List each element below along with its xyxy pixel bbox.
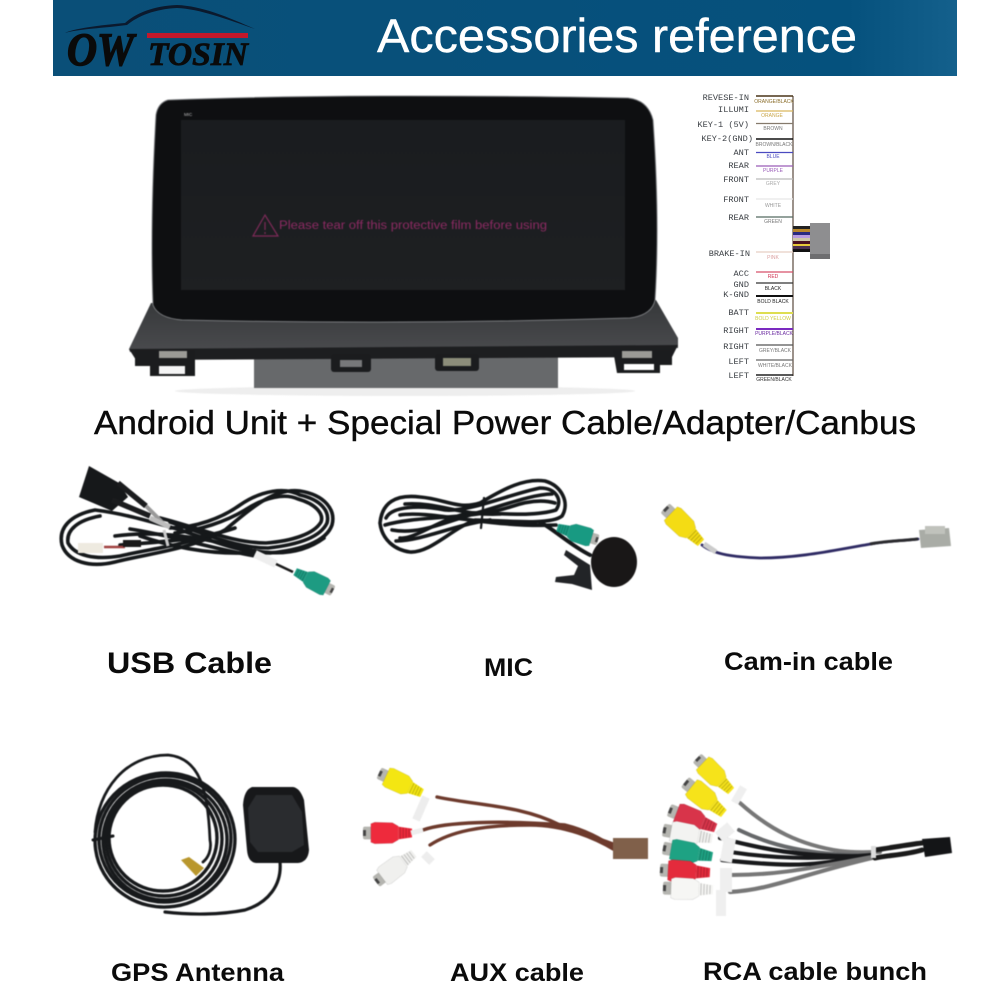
wire names: LEFT — [728, 371, 749, 381]
label: MIC: MIC — [484, 654, 533, 682]
USB connector housings — [79, 466, 128, 511]
wire names: ILLUMI — [718, 105, 749, 115]
wire colour names: RED — [768, 274, 779, 280]
gold SMA connector — [181, 857, 204, 876]
wire colour names: GREY — [766, 181, 781, 187]
wire names — [697, 93, 753, 381]
wire colour names: BROWN/BLACK — [756, 142, 793, 148]
cable coil — [380, 480, 590, 555]
item: GPS antenna — [86, 755, 309, 916]
wire colour names: GREEN/BLACK — [756, 377, 792, 383]
green RCA plug — [291, 563, 337, 599]
leader lines — [756, 96, 793, 375]
wire colour names: WHITE/BLACK — [758, 363, 793, 369]
wire names: LEFT — [728, 357, 749, 367]
logo: Owtosin: OW — [67, 24, 137, 76]
wire names: REAR — [728, 161, 749, 171]
grey connector — [919, 528, 951, 548]
cable coil — [86, 755, 280, 916]
wire names: BATT — [728, 308, 749, 318]
wire colour names: BLACK — [765, 286, 782, 292]
wire colour names: GREEN — [764, 219, 782, 225]
label: GPS antenna: GPS Antenna — [111, 959, 285, 987]
wire colour names: ORANGE/BLACK — [754, 99, 794, 105]
wire names: BRAKE-IN — [709, 249, 750, 259]
cables — [720, 803, 922, 892]
bezel — [152, 96, 657, 322]
wire names: REVESE-IN — [703, 93, 749, 103]
wire colour names: WHITE — [765, 203, 782, 209]
logo: Owtosin — [65, 5, 255, 76]
black connector — [922, 837, 952, 857]
panel: android head unit — [129, 96, 678, 396]
header banner — [53, 0, 957, 76]
title: Accessories reference — [377, 9, 857, 62]
wire names: FRONT — [723, 175, 749, 185]
floor shadow — [175, 386, 635, 396]
item: microphone — [380, 480, 637, 590]
plugs — [690, 750, 738, 799]
rear metal box — [254, 356, 558, 388]
wire colour names — [754, 99, 794, 383]
wire colour names: ORANGE — [761, 113, 783, 119]
wire colour names: PINK — [767, 255, 779, 261]
yellow RCA plug — [657, 500, 709, 551]
protective film notice: Please tear off this protective film before using — [279, 220, 547, 232]
trunk and connector — [793, 96, 830, 376]
wire colour names: BROWN — [763, 126, 783, 132]
screen — [181, 120, 625, 290]
wire colour names: PURPLE/BLACK — [755, 331, 794, 337]
item: RCA cable bunch — [659, 750, 952, 916]
item: USB cable — [61, 466, 337, 599]
white tags — [416, 797, 432, 862]
plugs — [375, 764, 426, 803]
green RCA plug — [555, 519, 601, 549]
brackets — [135, 350, 195, 376]
warning icon — [253, 215, 278, 236]
wire colour names: GREY/BLACK — [759, 348, 792, 354]
wire names: ACC — [734, 269, 749, 279]
caption: android unit: Android Unit + Special Power Cable/Adapter/Canbus — [94, 404, 916, 441]
label: cam-in cable: Cam-in cable — [724, 648, 893, 676]
mic label: MIC — [184, 112, 193, 117]
wire names: K-GND — [723, 290, 749, 300]
foam windscreen — [591, 537, 637, 587]
wire names: ANT — [734, 148, 749, 158]
silver bands — [150, 518, 170, 527]
item: AUX cable — [363, 764, 648, 890]
wire names: KEY-2(GND) — [701, 134, 753, 144]
item: camera-in cable — [657, 500, 951, 558]
clip — [555, 550, 592, 590]
brown cables — [423, 797, 615, 850]
label: USB cable: USB Cable — [107, 647, 272, 680]
wire colour names: BLUE — [766, 154, 780, 160]
cable coil — [61, 491, 333, 564]
wire names: FRONT — [723, 195, 749, 205]
wire names: KEY-1 (5V) — [697, 120, 749, 130]
white tags — [715, 785, 747, 916]
mounting frame — [129, 300, 678, 352]
antenna puck — [243, 787, 309, 863]
white plug — [78, 543, 103, 553]
logo: Owtosin: TOSIN — [148, 37, 249, 73]
wire colour names: BOLD YELLOW — [755, 316, 791, 322]
wire names: GND — [734, 280, 749, 290]
wire names: RIGHT — [723, 342, 749, 352]
wire names: RIGHT — [723, 326, 749, 336]
label: AUX cable: AUX cable — [450, 959, 584, 987]
brown connector — [613, 838, 648, 859]
label: RCA cable bunch: RCA cable bunch — [703, 958, 927, 986]
wiring diagram — [697, 93, 830, 383]
wire colour names: PURPLE — [763, 168, 784, 174]
white tag — [255, 554, 276, 564]
wire names: REAR — [728, 213, 749, 223]
wire colour names: BOLD BLACK — [757, 299, 789, 305]
